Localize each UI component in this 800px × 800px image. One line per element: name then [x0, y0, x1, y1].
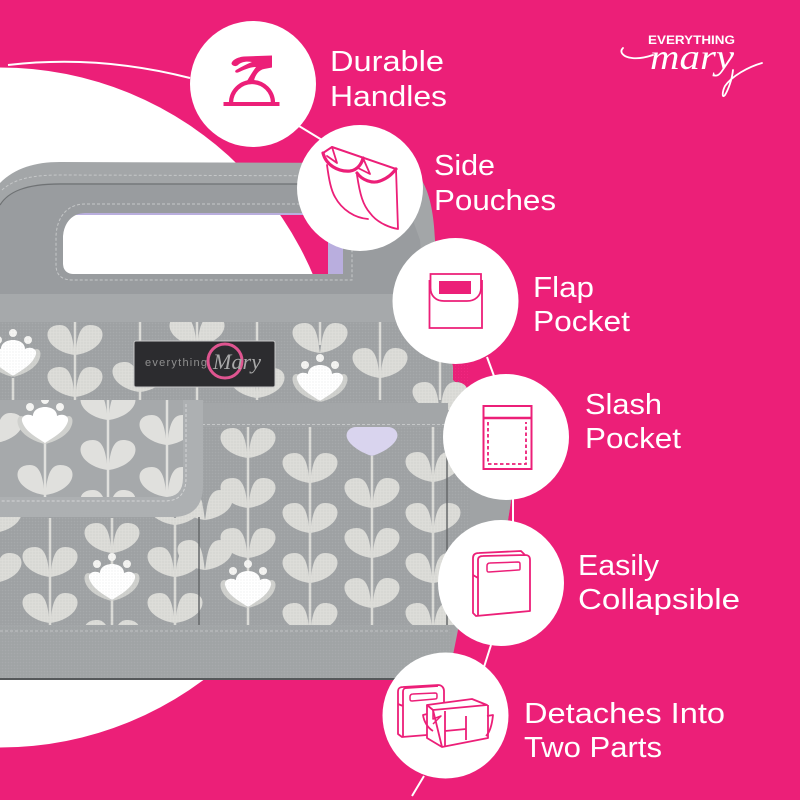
logo wordmark: EVERYTHING [648, 33, 735, 47]
bottom band stitching [0, 630, 450, 632]
label: easily collapsible: Easily [578, 550, 660, 582]
product photo: grey caddy bag [0, 162, 512, 680]
main pocket top band [202, 403, 448, 427]
label: flap pocket: Flap [533, 272, 594, 304]
lower handle band [0, 294, 450, 322]
logo script word: mary [650, 37, 734, 77]
label: slash pocket: Pocket [585, 423, 681, 455]
lavender tulip on main pocket [347, 427, 397, 456]
feature circle: side pouches [297, 125, 423, 251]
connector lines between feature circles [8, 62, 513, 796]
handle seam [0, 184, 395, 205]
icon: collapsible bag [473, 551, 530, 616]
label: durable handles: Durable [330, 46, 444, 78]
flap body [0, 400, 203, 517]
icon: two detached parts [398, 685, 493, 747]
label: side pouches [434, 150, 556, 217]
logo left swash [621, 48, 653, 58]
flap fabric [0, 400, 183, 497]
feature circle: durable handles [190, 21, 316, 147]
icon: side pouches [323, 147, 398, 229]
handle inner panel shade [0, 183, 425, 294]
logo right swash [723, 63, 762, 96]
bottom shadow [0, 678, 450, 680]
flap leaf pattern [0, 400, 183, 497]
repeating leaf pattern [0, 316, 468, 650]
feature circle: easily collapsible [438, 520, 564, 646]
label: detaches into two parts: Detaches Into [524, 698, 725, 730]
flap pocket [0, 400, 203, 517]
bag handle and body silhouette [0, 162, 512, 680]
brand logo [621, 33, 762, 96]
feature circle: flap pocket [392, 238, 518, 364]
label: flap pocket: Pocket [533, 306, 630, 338]
label: detaches into two parts: Two Parts [524, 732, 662, 764]
badge wordmark: everything [145, 357, 207, 369]
dark gusset fold [458, 381, 469, 400]
label: slash pocket: Slash [585, 389, 662, 421]
patterned fabric [0, 322, 450, 625]
feature circle: slash pocket [443, 374, 569, 500]
bottom band texture [0, 626, 452, 678]
handle stitching [0, 175, 445, 315]
right side gusset [445, 322, 512, 625]
flap stitching [0, 404, 186, 501]
label: flap pocket [533, 272, 630, 338]
main pocket stitching [202, 424, 448, 426]
label: side pouches: Pouches [434, 185, 556, 217]
badge pink ring [208, 344, 242, 378]
icon: hand lifting handle [224, 56, 280, 106]
metal logo badge [134, 341, 275, 387]
label: detaches into two parts [524, 698, 725, 764]
label: side pouches: Side [434, 150, 495, 182]
icon: slash pocket [484, 406, 532, 469]
white background circle [0, 68, 340, 748]
fabric weave texture [0, 322, 470, 625]
label: slash pocket [585, 389, 681, 455]
label: easily collapsible: Collapsible [578, 584, 740, 616]
label: easily collapsible [578, 550, 740, 616]
label: durable handles [330, 46, 447, 113]
badge script: Mary [212, 349, 261, 374]
bag rim behind the handle cut-out [70, 209, 346, 276]
icon: flap pocket [430, 274, 482, 328]
pocket edges [199, 427, 447, 625]
bottom band [0, 626, 455, 678]
label: durable handles: Handles [330, 81, 447, 113]
feature circle: detaches into two parts [382, 652, 508, 778]
